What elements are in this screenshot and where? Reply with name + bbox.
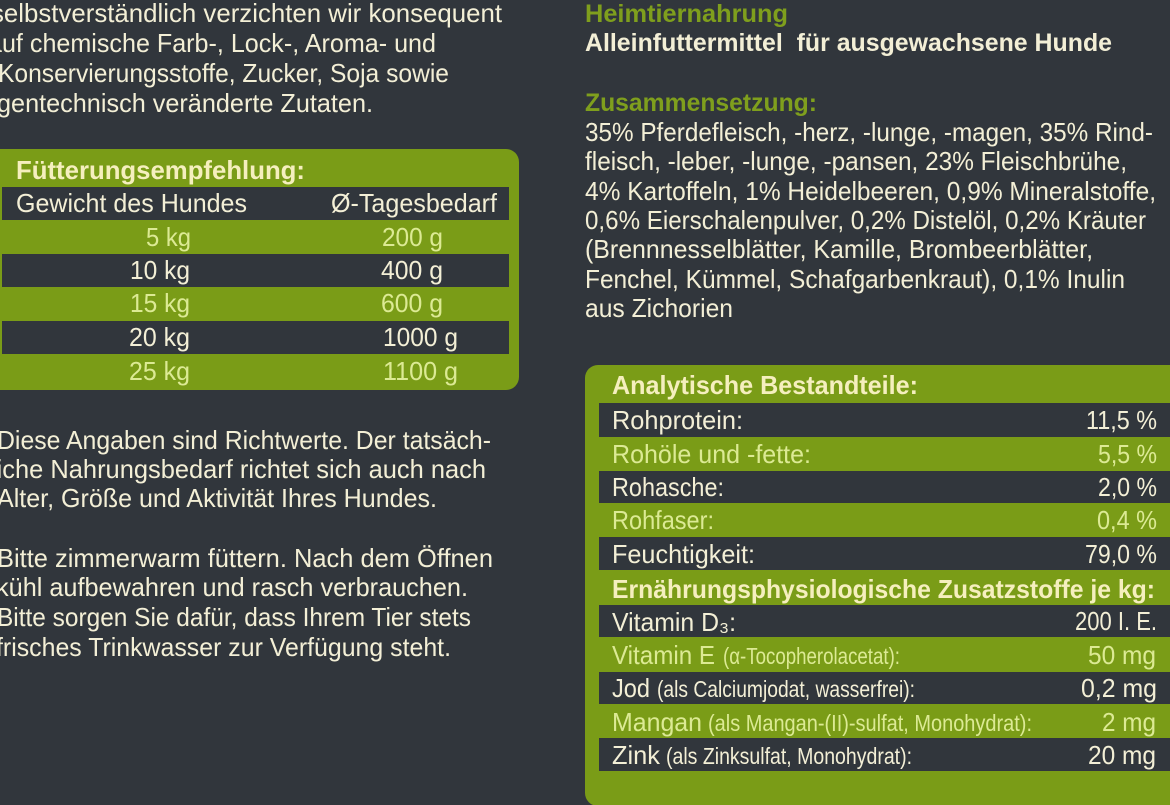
heading: feeding recommendation: Fütterungsempfehlung: xyxy=(16,155,305,185)
row: vitamin E: 50 mg xyxy=(1088,640,1156,670)
text block: guideline note xyxy=(0,425,491,513)
row: 15 kg: 15 kg xyxy=(130,288,190,318)
table header row: Ø-Tagesbedarf xyxy=(331,188,498,218)
text block: composition: fleisch, -leber, -lunge, -pansen, 23% Fleischbrühe, xyxy=(585,146,1127,176)
row: 20 kg: 1000 g xyxy=(383,322,458,352)
row: crude ash xyxy=(599,471,1170,503)
text block: composition xyxy=(585,117,1156,323)
row: iodine: (als Calciumjodat, wasserfrei): xyxy=(657,676,915,702)
row: manganese: Mangan xyxy=(612,707,702,737)
row: 10 kg xyxy=(2,254,509,287)
table header row: Gewicht des Hundes xyxy=(16,188,247,218)
text block: serving advice: frisches Trinkwasser zur Verfügung steht. xyxy=(0,632,451,662)
row: 15 kg xyxy=(130,288,443,318)
text block: serving advice: Bitte sorgen Sie dafür, dass Ihrem Tier stets xyxy=(0,602,471,632)
row: crude fat: Rohöle und -fette: xyxy=(612,439,811,469)
row: 15 kg: 600 g xyxy=(381,288,443,318)
row: 25 kg: 1100 g xyxy=(383,356,458,386)
text block: ingredients disclaimer: gentechnisch veränderte Zutaten. xyxy=(0,88,373,118)
table header row xyxy=(2,187,509,220)
row: 5 kg: 5 kg xyxy=(146,222,191,252)
heading: pet food: Heimtiernahrung xyxy=(585,0,788,28)
row: moisture xyxy=(599,537,1170,570)
row: 5 kg: 200 g xyxy=(382,222,443,252)
row: 10 kg: 400 g xyxy=(381,255,443,285)
row: vitamin D3: Vitamin D₃: xyxy=(612,607,736,637)
text block: ingredients disclaimer: Konservierungsstoffe, Zucker, Soja sowie xyxy=(0,58,449,88)
heading: composition: Zusammensetzung: xyxy=(585,89,817,117)
row: 20 kg xyxy=(2,321,509,354)
row: vitamin E: Vitamin E xyxy=(612,640,715,670)
row: 25 kg: 25 kg xyxy=(129,356,190,386)
text block: ingredients disclaimer xyxy=(0,0,503,118)
row: moisture: Feuchtigkeit: xyxy=(612,539,755,569)
row: zinc: Zink xyxy=(612,740,661,770)
row: vitamin E xyxy=(612,640,1156,670)
row: 25 kg xyxy=(129,356,458,386)
row: crude protein: 11,5 % xyxy=(1086,405,1157,435)
panel: analytical constituents xyxy=(585,365,1170,805)
row: zinc xyxy=(599,738,1170,771)
row: crude fibre: Rohfaser: xyxy=(612,505,714,535)
row: crude ash: 2,0 % xyxy=(1098,472,1157,502)
row: 20 kg: 20 kg xyxy=(129,322,190,352)
row: crude ash: Rohasche: xyxy=(612,472,724,502)
row: crude fibre: 0,4 % xyxy=(1097,505,1157,535)
row: crude protein xyxy=(599,403,1170,437)
text block: serving advice: Bitte zimmerwarm füttern. Nach dem Öffnen xyxy=(0,543,493,573)
row: manganese: (als Mangan-(II)-sulfat, Monohydrat): xyxy=(708,710,1032,736)
text block: guideline note: liche Nahrungsbedarf richtet sich auch nach xyxy=(0,454,486,484)
text block: ingredients disclaimer: auf chemische Farb-, Lock-, Aroma- und xyxy=(0,28,436,58)
row: crude protein: Rohprotein: xyxy=(612,405,743,435)
row: manganese: 2 mg xyxy=(1102,707,1156,737)
panel: feeding recommendation xyxy=(0,149,519,390)
text block: guideline note: Alter, Größe und Aktivität Ihres Hundes. xyxy=(0,483,437,513)
heading: nutritional additives: Ernährungsphysiologische Zusatzstoffe je kg: xyxy=(612,574,1155,604)
row: vitamin D3 xyxy=(599,605,1170,637)
row: crude fibre xyxy=(612,505,1157,535)
row: iodine: 0,2 mg xyxy=(1081,673,1157,703)
row: crude fat xyxy=(612,439,1157,469)
row: vitamin E: (α-Tocopherolacetat): xyxy=(723,643,900,669)
row: zinc: 20 mg xyxy=(1088,740,1156,770)
text block: composition: (Brennnesselblätter, Kamille, Brombeerblätter, xyxy=(585,234,1093,264)
row: 5 kg xyxy=(146,222,443,252)
row: zinc: (als Zinksulfat, Monohydrat): xyxy=(666,743,912,769)
heading: analytical constituents: Analytische Bestandteile: xyxy=(612,370,918,400)
row: manganese xyxy=(612,707,1156,737)
subheading: complete feed: Alleinfuttermittel für ausgewachsene Hunde xyxy=(585,29,1112,57)
row: iodine xyxy=(599,672,1170,704)
text block: serving advice: kühl aufbewahren und rasch verbrauchen. xyxy=(0,572,468,602)
row: vitamin D3: 200 I. E. xyxy=(1075,606,1157,636)
row: iodine: Jod xyxy=(612,673,650,703)
text block: serving advice xyxy=(0,543,493,662)
text block: composition: aus Zichorien xyxy=(585,293,733,323)
row: 10 kg: 10 kg xyxy=(130,255,190,285)
text block: composition: Fenchel, Kümmel, Schafgarbenkraut), 0,1% Inulin xyxy=(585,264,1125,294)
text block: guideline note: Diese Angaben sind Richtwerte. Der tatsäch- xyxy=(0,425,491,455)
row: moisture: 79,0 % xyxy=(1085,539,1157,569)
row: crude fat: 5,5 % xyxy=(1098,439,1157,469)
